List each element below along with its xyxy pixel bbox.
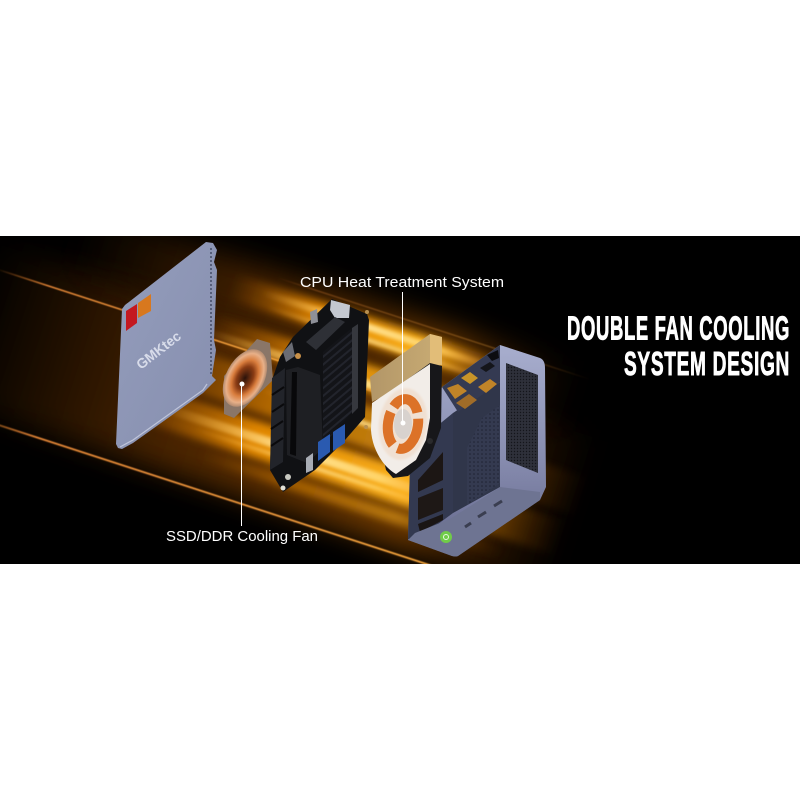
top grid [442,345,500,412]
front ports [465,501,502,527]
centre plate [286,367,323,463]
left heatsink [270,368,285,470]
computer case [408,345,546,556]
label: SSD/DDR Cooling Fan: SSD/DDR Cooling Fan [166,529,318,545]
front strip [408,487,540,556]
side mesh [506,363,538,473]
mesh body [453,382,500,513]
power button [440,531,452,543]
top connectors [330,300,350,318]
heat fins [323,328,352,445]
label: CPU Heat Treatment System: CPU Heat Treatment System [300,275,504,291]
black banner with orange light streaks [0,236,800,564]
left bays [408,413,453,541]
title [567,310,790,383]
side panel with GMKtec logo [116,242,217,449]
leader line: SSD/DDR fan [240,384,242,526]
badge: red processor label [126,304,137,331]
leader line: CPU heat treatment [402,292,404,423]
USB ports [318,434,330,461]
CPU blower fan with copper heatsink [370,334,442,478]
infographic canvas [0,236,800,564]
motherboard [270,299,369,492]
badge: orange processor label [138,294,151,318]
SSD/DDR cooling fan [214,339,276,418]
logo text: GMKtec [133,328,184,372]
